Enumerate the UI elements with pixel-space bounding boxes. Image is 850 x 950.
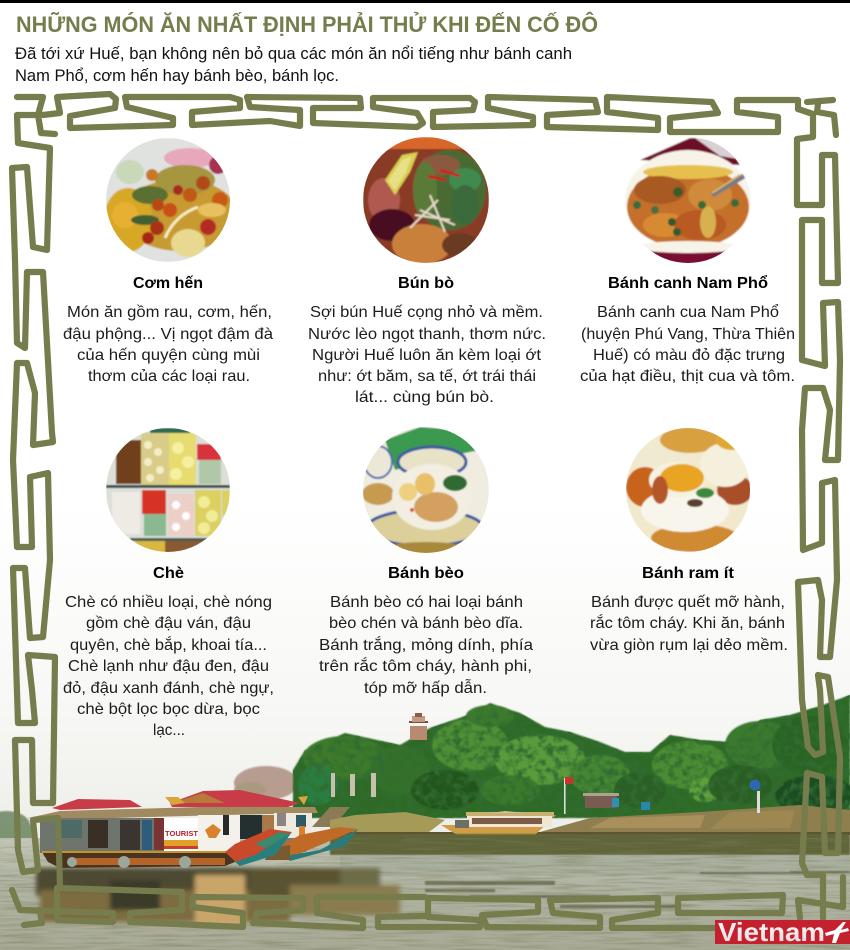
description: Bánh bèo: bèo chén và bánh bèo dĩa. — [329, 615, 523, 632]
description: Bún bò: lát... cùng bún bò. — [355, 389, 494, 406]
small building — [583, 793, 650, 810]
far left trees — [0, 811, 32, 840]
heading: Chè: Chè — [153, 565, 184, 582]
bottom meander — [678, 895, 783, 913]
front bow — [225, 829, 292, 866]
tree line — [293, 695, 850, 818]
description: Cơm hến: đậu phộng... Vị ngọt đậm đà — [63, 326, 273, 343]
icon: plus plane — [825, 922, 849, 943]
description: Bánh ram ít: rắc tôm cháy. Khi ăn, bánh — [590, 613, 785, 632]
description: Cơm hến: thơm của các loại rau. — [88, 368, 250, 385]
heading: Bánh bèo: Bánh bèo — [388, 565, 464, 582]
description: Bún bò — [308, 304, 546, 406]
bare tree behind boat — [234, 766, 298, 800]
description: Chè: lạc... — [153, 722, 185, 739]
top-left corner and top meander — [12, 97, 60, 887]
panel: Bún bò — [308, 137, 546, 406]
description: Cơm hến — [63, 304, 273, 385]
description: Bánh ram ít: vừa giòn rụm lại dẻo mềm. — [590, 637, 788, 654]
flag — [564, 777, 573, 814]
water — [0, 834, 850, 950]
panel: Bánh canh Nam Phổ — [580, 137, 795, 385]
dragon boat: TOURIST — [165, 829, 198, 838]
foliage texture — [293, 695, 850, 818]
rear cabin — [40, 818, 225, 853]
description: Bánh bèo: Bánh trắng, mỏng dính, phía — [319, 635, 533, 654]
parking sign — [750, 780, 760, 813]
food photo: Bánh bèo — [362, 427, 489, 554]
description: Bánh bèo: Bánh bèo có hai loại bánh — [330, 594, 523, 611]
description: Bánh bèo: tóp mỡ hấp dẫn. — [364, 678, 487, 697]
description: Chè — [63, 594, 274, 739]
title: NHỮNG MÓN ĂN NHẤT ĐỊNH PHẢI THỬ KHI ĐẾN CỐ ĐÔ — [16, 11, 598, 37]
description: Bánh canh Nam Phổ — [580, 303, 795, 385]
intro text: Đã tới xứ Huế, bạn không nên bỏ qua các món ăn nổi tiếng như bánh canh — [15, 44, 572, 63]
description: Bún bò: Nước lèo ngọt thanh, thơm nức. — [308, 326, 546, 343]
panel: Cơm hến — [63, 138, 273, 385]
description: Chè: đỏ, đậu xanh đánh, chè ngự, — [63, 680, 274, 697]
description: Bánh bèo: trên rắc tôm cháy, hành phi, — [319, 656, 532, 675]
description: Chè: gồm chè đậu ván, đậu — [86, 615, 251, 632]
description: Bún bò: như: ớt băm, sa tế, ớt trái thái — [318, 368, 536, 385]
description: Bánh canh Nam Phổ: Huế) có màu đỏ đặc trưng — [593, 347, 785, 364]
description: Bánh ram ít — [590, 594, 788, 654]
boat reflection in water — [36, 868, 400, 925]
food photo: Cơm hến — [104, 138, 238, 262]
Thien Mu tower — [409, 713, 428, 740]
food photo: Bún bò — [363, 137, 489, 264]
long tan roof — [28, 807, 318, 820]
description: Bánh canh Nam Phổ: của hạt điều, thịt cua và tôm. — [580, 368, 795, 385]
description: Chè: Chè lạnh như đậu đen, đậu — [68, 658, 269, 675]
intro text — [15, 44, 572, 85]
heading: Bánh ram ít: Bánh ram ít — [642, 565, 735, 582]
top-right corner and right meander — [807, 100, 833, 102]
river bank — [330, 805, 850, 835]
top black bar — [0, 0, 850, 3]
upper red roof — [170, 790, 300, 807]
heading: Bánh canh Nam Phổ: Bánh canh Nam Phổ — [608, 274, 768, 292]
panel: Bánh bèo — [319, 427, 533, 697]
food photo: Bánh canh Nam Phổ — [625, 137, 751, 265]
description: Chè: quyên, chè bắp, khoai tía... — [70, 635, 267, 654]
front cabin — [198, 815, 240, 852]
photo: Huong river with Thien Mu pagoda and dragon boat — [0, 695, 850, 950]
heading: Bún bò: Bún bò — [398, 275, 454, 292]
heading: Cơm hến: Cơm hến — [133, 275, 203, 292]
description: Bánh canh Nam Phổ: (huyện Phú Vang, Thừa Thiên — [581, 326, 795, 343]
tourist sign — [164, 818, 198, 852]
second boat — [441, 811, 556, 835]
description: Bún bò: Sợi bún Huế cọng nhỏ và mềm. — [310, 304, 543, 321]
panel: Bánh ram ít — [590, 427, 788, 654]
intro text: Nam Phổ, cơm hến hay bánh bèo, bánh lọc. — [15, 66, 339, 85]
description: Bánh bèo — [319, 594, 533, 697]
description: Bún bò: Người Huế luôn ăn kèm loại ớt — [312, 347, 542, 364]
description: Chè: Chè có nhiều loại, chè nóng — [65, 594, 272, 611]
food photo: Bánh ram ít — [626, 427, 753, 552]
description: Bánh canh Nam Phổ: Bánh canh cua Nam Phổ — [597, 303, 779, 321]
rear hull — [278, 838, 306, 852]
description: Chè: chè bột lọc bọc dừa, bọc — [77, 701, 260, 718]
food photo: Chè — [106, 428, 230, 553]
description: Bánh ram ít: Bánh được quết mỡ hành, — [591, 594, 785, 611]
stairs and gate pillars — [312, 773, 376, 827]
panel: Chè — [63, 428, 274, 739]
hull — [42, 852, 235, 868]
description: Cơm hến: của hến quyện cùng mùi — [77, 347, 260, 364]
logo: Vietnam+: Vietnam — [718, 917, 825, 947]
description: Cơm hến: Món ăn gồm rau, cơm, hến, — [67, 304, 272, 321]
dragon boat — [28, 790, 358, 868]
